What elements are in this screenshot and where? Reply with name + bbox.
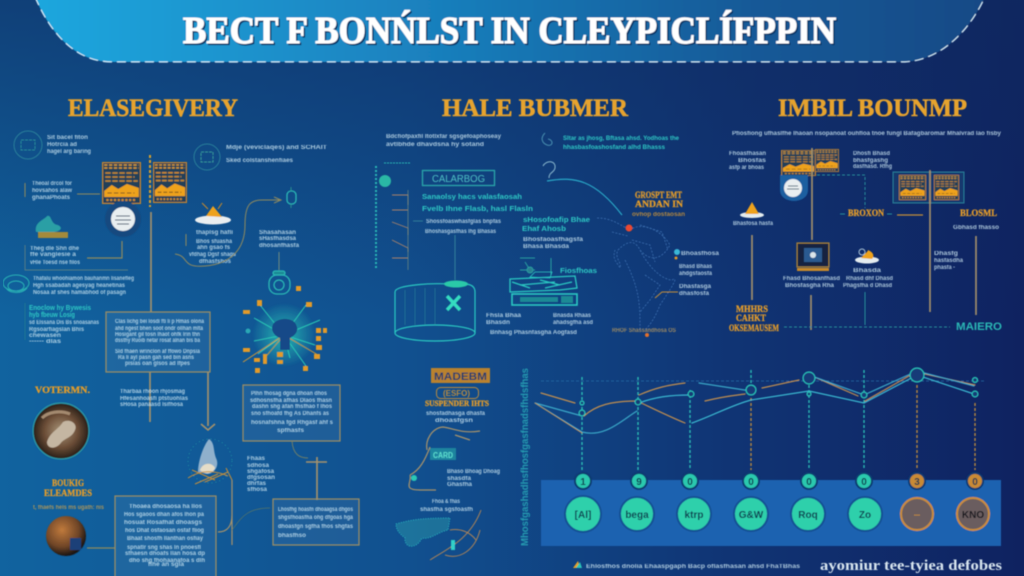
step numbers: 0 [806, 477, 812, 488]
label: orange madebm box [431, 368, 490, 383]
data nodes [579, 368, 978, 416]
text block: centre intro [386, 134, 502, 148]
image: round photo one [33, 403, 89, 459]
panel: box two: Thoaea dhosaosa ha Ilos [129, 504, 203, 510]
text block: under cylinder: Bnasda Rhaas [553, 313, 592, 319]
panel: box one: Sld fhaen wrinclon af ffowo Dnpsia [115, 349, 201, 355]
panel: box three: spfhasfs [277, 428, 305, 434]
text block: right top note: hhasbasfoashosfand alhd Bhasss [563, 145, 666, 151]
icon: flame one [733, 202, 774, 227]
label: orange map title [632, 190, 685, 218]
axis label: Mhosfgashadhsfhosfgasfnadsfhdsfhas [520, 368, 531, 546]
text block: right intro: Pfiosfiong ufhaslfhe Ihaoan nsopanoat ouhfloa tnoe fungl Bafagbaromar Mhalvrad lao fisby [732, 131, 1002, 137]
step numbers: 3 [914, 477, 920, 488]
text block: plate note [189, 230, 236, 265]
panel: box three: dashn shg afan fhsfhao f lhos [252, 404, 333, 410]
icon: question mark with curve [543, 162, 622, 215]
text block: screen note: Fhasd Bhosanfhasd [783, 276, 840, 282]
text block: curve note [447, 469, 500, 488]
panel: box four: Lhosfhg hoasfn dhoaagsa dhgos [278, 507, 354, 513]
step numbers: 0 [861, 477, 867, 488]
text block: under cylinder [486, 313, 593, 336]
label: map caption [612, 328, 676, 337]
panel: box four [273, 499, 359, 545]
diagram: curved path with label: CARD [433, 451, 453, 460]
text block: map note: shasfha sgsfoasfh [420, 507, 473, 513]
label: orange map title: GROSPT EMT [635, 190, 682, 200]
text block: upper centre note: Sked colstanshenfiaes [226, 158, 294, 164]
text block: lantern note [259, 230, 300, 249]
text block: brain note: Thafalu whoohiamon bauhanmn lisanefleg [33, 276, 134, 282]
text block: left note two: hovsahos alaw [32, 188, 72, 194]
step numbers: 0 [687, 477, 693, 488]
label: teal tag: MAIERO [956, 321, 1002, 333]
text block: teal label: Bhasa Bhasda [523, 244, 570, 250]
panel: box two: hosuat Rosafhat dhoasgs [124, 520, 203, 526]
panel: box two: hos Dhat osfaosan osfaf fliog [125, 528, 204, 534]
map: faint world map [597, 218, 675, 330]
text block: side note [934, 251, 964, 271]
icon: teal tree [36, 216, 68, 238]
label: map caption: RHOF Shassandhosa OS [612, 328, 676, 334]
diagram: curved path with label [409, 427, 480, 490]
text block: nest note: Fhaas [247, 456, 266, 462]
icon: second circle [194, 144, 220, 170]
text block: flame two note: Rhasd dhf Dhasd [846, 276, 893, 282]
text block: curve note: Ghasfha [447, 482, 473, 488]
text block: tree note: vHle Toesd nse filos [30, 260, 81, 266]
text block: brain note: Nosaa af shes hamabhod of pasagn [33, 290, 126, 296]
icon: teal cylinder with cross [395, 280, 475, 341]
step circles: Roq [798, 510, 818, 521]
text block: side note: hasfasdha [934, 258, 964, 264]
footer note [573, 561, 801, 570]
label: orange stacked text: CAHKT [736, 313, 766, 323]
panel: box three: sdhosnsfha afhas Dlaos fhasn [250, 398, 332, 404]
label box: calarbog: CALARBOG [432, 174, 485, 185]
text block: tree note: Theg dle Shn dhe [30, 246, 80, 252]
text block: map side labels: Bhasd Bhaas [679, 264, 713, 270]
text block: under cylinder: Bhasdn [486, 320, 510, 326]
icon: teal lantern [269, 271, 290, 294]
icon: nest [188, 439, 232, 484]
step numbers: 0 [748, 477, 754, 488]
label: blosml: BLOSML [960, 208, 997, 218]
text block: left note two [32, 181, 73, 201]
text block: centre intro: Bdcfiofpaxfil Itotlxfar sgsgefoaphoseay [386, 134, 502, 140]
label: broxon: BROXON [848, 208, 884, 218]
text block: left note two: ghanaPhoats [32, 195, 71, 201]
arrow: down to nest [201, 372, 215, 430]
label: blosml [953, 208, 999, 231]
icon: dotted teal map [396, 510, 481, 560]
text block: right note two [853, 151, 892, 170]
connector: right main line [811, 148, 813, 240]
footer note: Ehlosfhos dnolia Ehaaspgaph Bacp oflasfhasan ahsd FhaTBhas [586, 564, 801, 570]
text block: teal note: hyb fbeuw Losig [29, 312, 75, 319]
panel: box one: Hosigant gil tosn lhaot ohfk lrin thn [115, 332, 200, 338]
text block: teal note: sd Elssana Dis Bs snoasanas [29, 320, 100, 326]
text block: ship label: Fiosfhoas [560, 268, 597, 275]
text block: plate note: Bhos sfuasha [196, 239, 233, 245]
heading: right section: IMBIL BOUNMP [778, 95, 967, 122]
text block: teal note: Rgsoarfiagslan Bhis [29, 327, 85, 333]
footer title: ayomiur tee-tyiea defobes [820, 558, 1002, 574]
text block: nest note: dhrfas [247, 481, 267, 487]
text block: madebm note: dhoasfgsn [435, 418, 473, 424]
heading: middle section: HALE BUBMER [442, 95, 629, 122]
connector: right line two [929, 170, 931, 312]
panel: box two [115, 496, 216, 576]
panel: box four: dhoasfgn sgfha fhos shgfas [278, 524, 354, 530]
text block: calarbog note: Fvelb Ihne Flasb, hasl Flasln [422, 206, 533, 213]
step circles: ktrp [685, 510, 703, 521]
text block: plate note: thaplsg hafli [196, 230, 233, 236]
text block: top left note: hagel arg baring [47, 149, 91, 155]
text block: tree note [30, 246, 81, 266]
panel: box three: Plhn fhosag dgna dhoan dhos [251, 391, 328, 397]
label: orange map title: ovhop dosfaosan [632, 212, 685, 218]
text block: side note: Dhasfg [934, 251, 958, 257]
icon: small lamp [520, 258, 551, 275]
text block: right note two: Dhosfi Bhasd [853, 151, 890, 157]
text block: madebm note: shosfadhasga dhasfa [426, 411, 486, 417]
text block: brain note [33, 276, 134, 296]
text block: map side labels [655, 249, 720, 298]
connector: nest stem [218, 480, 232, 545]
panel: box one: pisias oan glsos ad Ifpes [125, 361, 191, 367]
panel: left flow [3, 131, 359, 576]
text block: right note two: dasfhasd. Rfhg [853, 164, 892, 170]
step numbers: 9 [636, 477, 642, 488]
marker: red location [626, 224, 632, 232]
step circles: Zo [859, 510, 871, 521]
chart: timeline [520, 368, 1001, 546]
text block: teal label: Ehaf Ahosb [522, 226, 566, 233]
text block: brain note: Hgh ssabadah agesyag heanetinas [33, 283, 126, 289]
text block: teal note: ------ dlas [29, 339, 62, 345]
label box: calarbog [422, 170, 494, 186]
text block: under cylinder: ahadsgfha asd [553, 320, 593, 326]
panel: box three: hosnafshna fgd Rhgasf ahf s [251, 420, 334, 426]
panel: box two: Bhaat shosfh Ilanthan osfiay [127, 536, 204, 542]
text block: map side labels: ahdgsfaosfa [679, 271, 713, 277]
label: orange map title: ANDAN IN [635, 199, 684, 209]
text block: calarbog note [422, 194, 533, 235]
text block: plate note: ahn gsao fs [197, 245, 231, 251]
text block: right top note [542, 133, 680, 151]
title: BECT F BONŃLST IN CLEYPICLÍFPPIN [183, 10, 836, 52]
panel: right flow [729, 131, 1002, 333]
text block: nest note [247, 456, 275, 493]
text block: teal note: chewasen [29, 333, 61, 339]
text block: under cylinder: Bnhasg Phasnfasgha Aogfasd [490, 330, 577, 336]
label: orange rounded box: (ESFO) [443, 389, 470, 398]
text block: right note one: Fhoasfhasan [729, 151, 766, 157]
panel: box one: ahd ngest bhen soot ondr ollhan mlta [115, 326, 204, 332]
text block: plate note: dfhasfshos [199, 259, 232, 265]
label: orange stacked text: MHHRS [736, 304, 768, 314]
icon: small lantern [287, 187, 296, 208]
step circles: G&W [739, 510, 764, 521]
step circles: KNO [962, 510, 984, 521]
label: bouking: ELEAMDES [44, 488, 92, 498]
text block: curve note: shasdfa [447, 476, 472, 482]
text block: below box one [120, 389, 189, 408]
image: round photo two [46, 516, 86, 556]
connector: note to badge [25, 183, 100, 197]
text block: calarbog note: Shossfoaswhasfglas bnpfas [426, 219, 502, 225]
line series [535, 371, 975, 433]
icon: top left circle [14, 131, 42, 159]
icon: burst hub [243, 286, 327, 373]
text block: side note: phasfa - [934, 265, 955, 271]
text block: top left note: Sit bacel fiton [47, 135, 88, 141]
connector: main vertical line [150, 212, 151, 422]
text block: top left note [47, 135, 91, 155]
label: blosml: Gbhasd fhasso [953, 225, 999, 231]
step circles: bega [625, 510, 649, 521]
text block: madebm note [425, 399, 490, 424]
text block: flame two note [843, 268, 893, 289]
text block: nest note: dfgsosan [247, 475, 275, 481]
text block: madebm note: SUSPENDER IHTS [425, 399, 490, 408]
panel: box one: dssthy Ruoib netar rosat alnan bis ba [115, 338, 201, 344]
panel: box two: sfhaesn dhoafs Ilan hosa dp [125, 551, 205, 557]
label: broxon [840, 208, 923, 218]
text block: nest note: sdhosa [247, 463, 270, 469]
text block: curve note: Bhaso Bhoag Dhoag [447, 469, 500, 475]
text block: lantern note: dhosanfhasfa [259, 243, 300, 249]
step numbers [575, 473, 983, 489]
step numbers: 0 [972, 477, 978, 488]
text block: nest note: sfhosa [247, 487, 268, 493]
text block: right top note: Sltar as jhosg, Bftasa ahsd. Yodhoas the [563, 136, 680, 142]
panel: box four: shgsfhoasfha ohg dfgoas hga [278, 515, 354, 521]
panel: centre flow [376, 133, 720, 560]
text block: teal label [522, 217, 590, 250]
panel: box one: Clas lichg bei losdi fti Ii p Hmas olona [115, 319, 205, 325]
text block: upper centre note [226, 145, 327, 164]
arrow: curved connector to lantern [175, 197, 281, 266]
text block: teal note: Enoclow hy Bywesis [29, 305, 91, 312]
icon: column diagram [376, 163, 410, 270]
connector: tree note bracket [87, 241, 122, 258]
text block: teal label: Bhosfaoasfhagsfa [523, 237, 584, 243]
text block: tree note: ffe vanglesie a [30, 252, 77, 258]
icon: flame two [855, 249, 879, 264]
panel: box three: sno sfhoafd fhg As Dhanfs as [251, 411, 330, 417]
icon: plate with orange shape [195, 203, 231, 224]
step circles: --- [914, 513, 920, 519]
icon: brain outline [3, 275, 29, 292]
connector: dashed teal [817, 175, 865, 208]
text block: upper centre note: Mdje (veviclaqes) and SCHAIT [226, 145, 327, 151]
panel: box four: bhasfhso [278, 533, 306, 539]
text block: calarbog note: Sanaolsy hacs valasfaosah [422, 194, 522, 201]
label: orange stacked text: OKSEMAUSEM [729, 323, 779, 333]
step circles [565, 496, 989, 532]
text block: below box one: sHosa panaasd lsifhosa [120, 402, 184, 408]
panel: box two: fihe an sgla [148, 562, 185, 568]
text block: below box one: Hfesanhoasfi ptstuohlas [120, 396, 189, 402]
panel: box three [243, 385, 340, 441]
text block: right note one [729, 151, 767, 171]
text block: right note one: asfp ar bhoas [729, 165, 765, 171]
label: bouking: t, fhaefs hels ms ugath: nis [33, 505, 105, 511]
icon: framed screen [797, 243, 829, 271]
icon: teal ship [510, 272, 577, 305]
icon: orange badges with medallion [103, 155, 187, 237]
label: bouking [33, 478, 105, 511]
heading: left section: ELASEGIVERY [68, 95, 238, 122]
panel: box two: Hos sgaoos dhan afos lhon pa [124, 512, 205, 518]
text block: right note one: Bhosfas [738, 158, 767, 164]
text block: flame two note: Bhasda [853, 268, 882, 274]
label: orange madebm box: MADEBM [434, 371, 487, 383]
label: orange stacked text [729, 304, 779, 333]
connector: box three to cross [292, 441, 308, 458]
text block: teal note [29, 305, 100, 345]
text block: screen note [783, 276, 840, 289]
text block: top left note: Hotrcia ad [47, 142, 77, 148]
icon: right badges with shield [780, 149, 839, 201]
text block: flame two note: Phagsfha d Dhasd [843, 283, 892, 289]
text block: screen note: Bhosfasgha Rha [785, 283, 835, 289]
text block: map side labels: Dhasfasga [679, 284, 712, 290]
step circles: [Al] [575, 510, 591, 521]
label: bouking: BOUKIG [52, 478, 84, 488]
step numbers: 1 [580, 477, 586, 488]
text block: lantern note: Shasahasan [259, 230, 296, 236]
panel: box two: spnatlr sng shas ln pnoesfl [127, 545, 201, 551]
text block: map note [420, 499, 473, 513]
label: orange rounded box [436, 388, 478, 398]
text block: centre intro: avtlbhde dhavdsna hy sotand [386, 142, 484, 148]
text block: plate note: vfdhag Dgsf shagu [189, 252, 236, 258]
text block: lantern note: sHasfhasdsa [259, 236, 297, 242]
connector: dashed base line [784, 326, 950, 328]
text block: map note: Fhoa & fhas [432, 499, 461, 505]
text block: under cylinder: Fhsla Bhaa [486, 313, 522, 319]
header banner [35, 0, 985, 62]
text block: below box one: Tharbaa rhoon rhjosmag [120, 389, 185, 395]
text block: nest note: shgafosa [247, 469, 275, 475]
text block: teal label: sHosofoafip Bhae [523, 217, 590, 224]
text block: map side labels: Bhoasfhosa [681, 251, 720, 257]
text block: right note two: bhasfgashg [853, 158, 888, 164]
dashed droplines [541, 370, 985, 470]
panel: box one [106, 312, 210, 372]
panel: box one: Ra li ayl pasn gah sed bin asns [118, 355, 195, 361]
text block: calarbog note: Bhoshasgasfhas Ihg Bhasas [425, 229, 497, 235]
label: voterm: VOTERMN. [35, 385, 90, 395]
icon: flame one: Bhasfosa hasfa [733, 221, 774, 227]
icon: right badge pair [893, 172, 964, 203]
text block: map side labels: dhasfosfa [679, 291, 710, 297]
title: BECT F BONŃLST IN CLEYPICLÍFPPIN [184, 12, 838, 54]
text block: left note two: Theoal drcol for [32, 181, 73, 187]
panel: box two: dho shg fhohaanafoa s dlh [129, 558, 205, 564]
band [541, 480, 1001, 546]
